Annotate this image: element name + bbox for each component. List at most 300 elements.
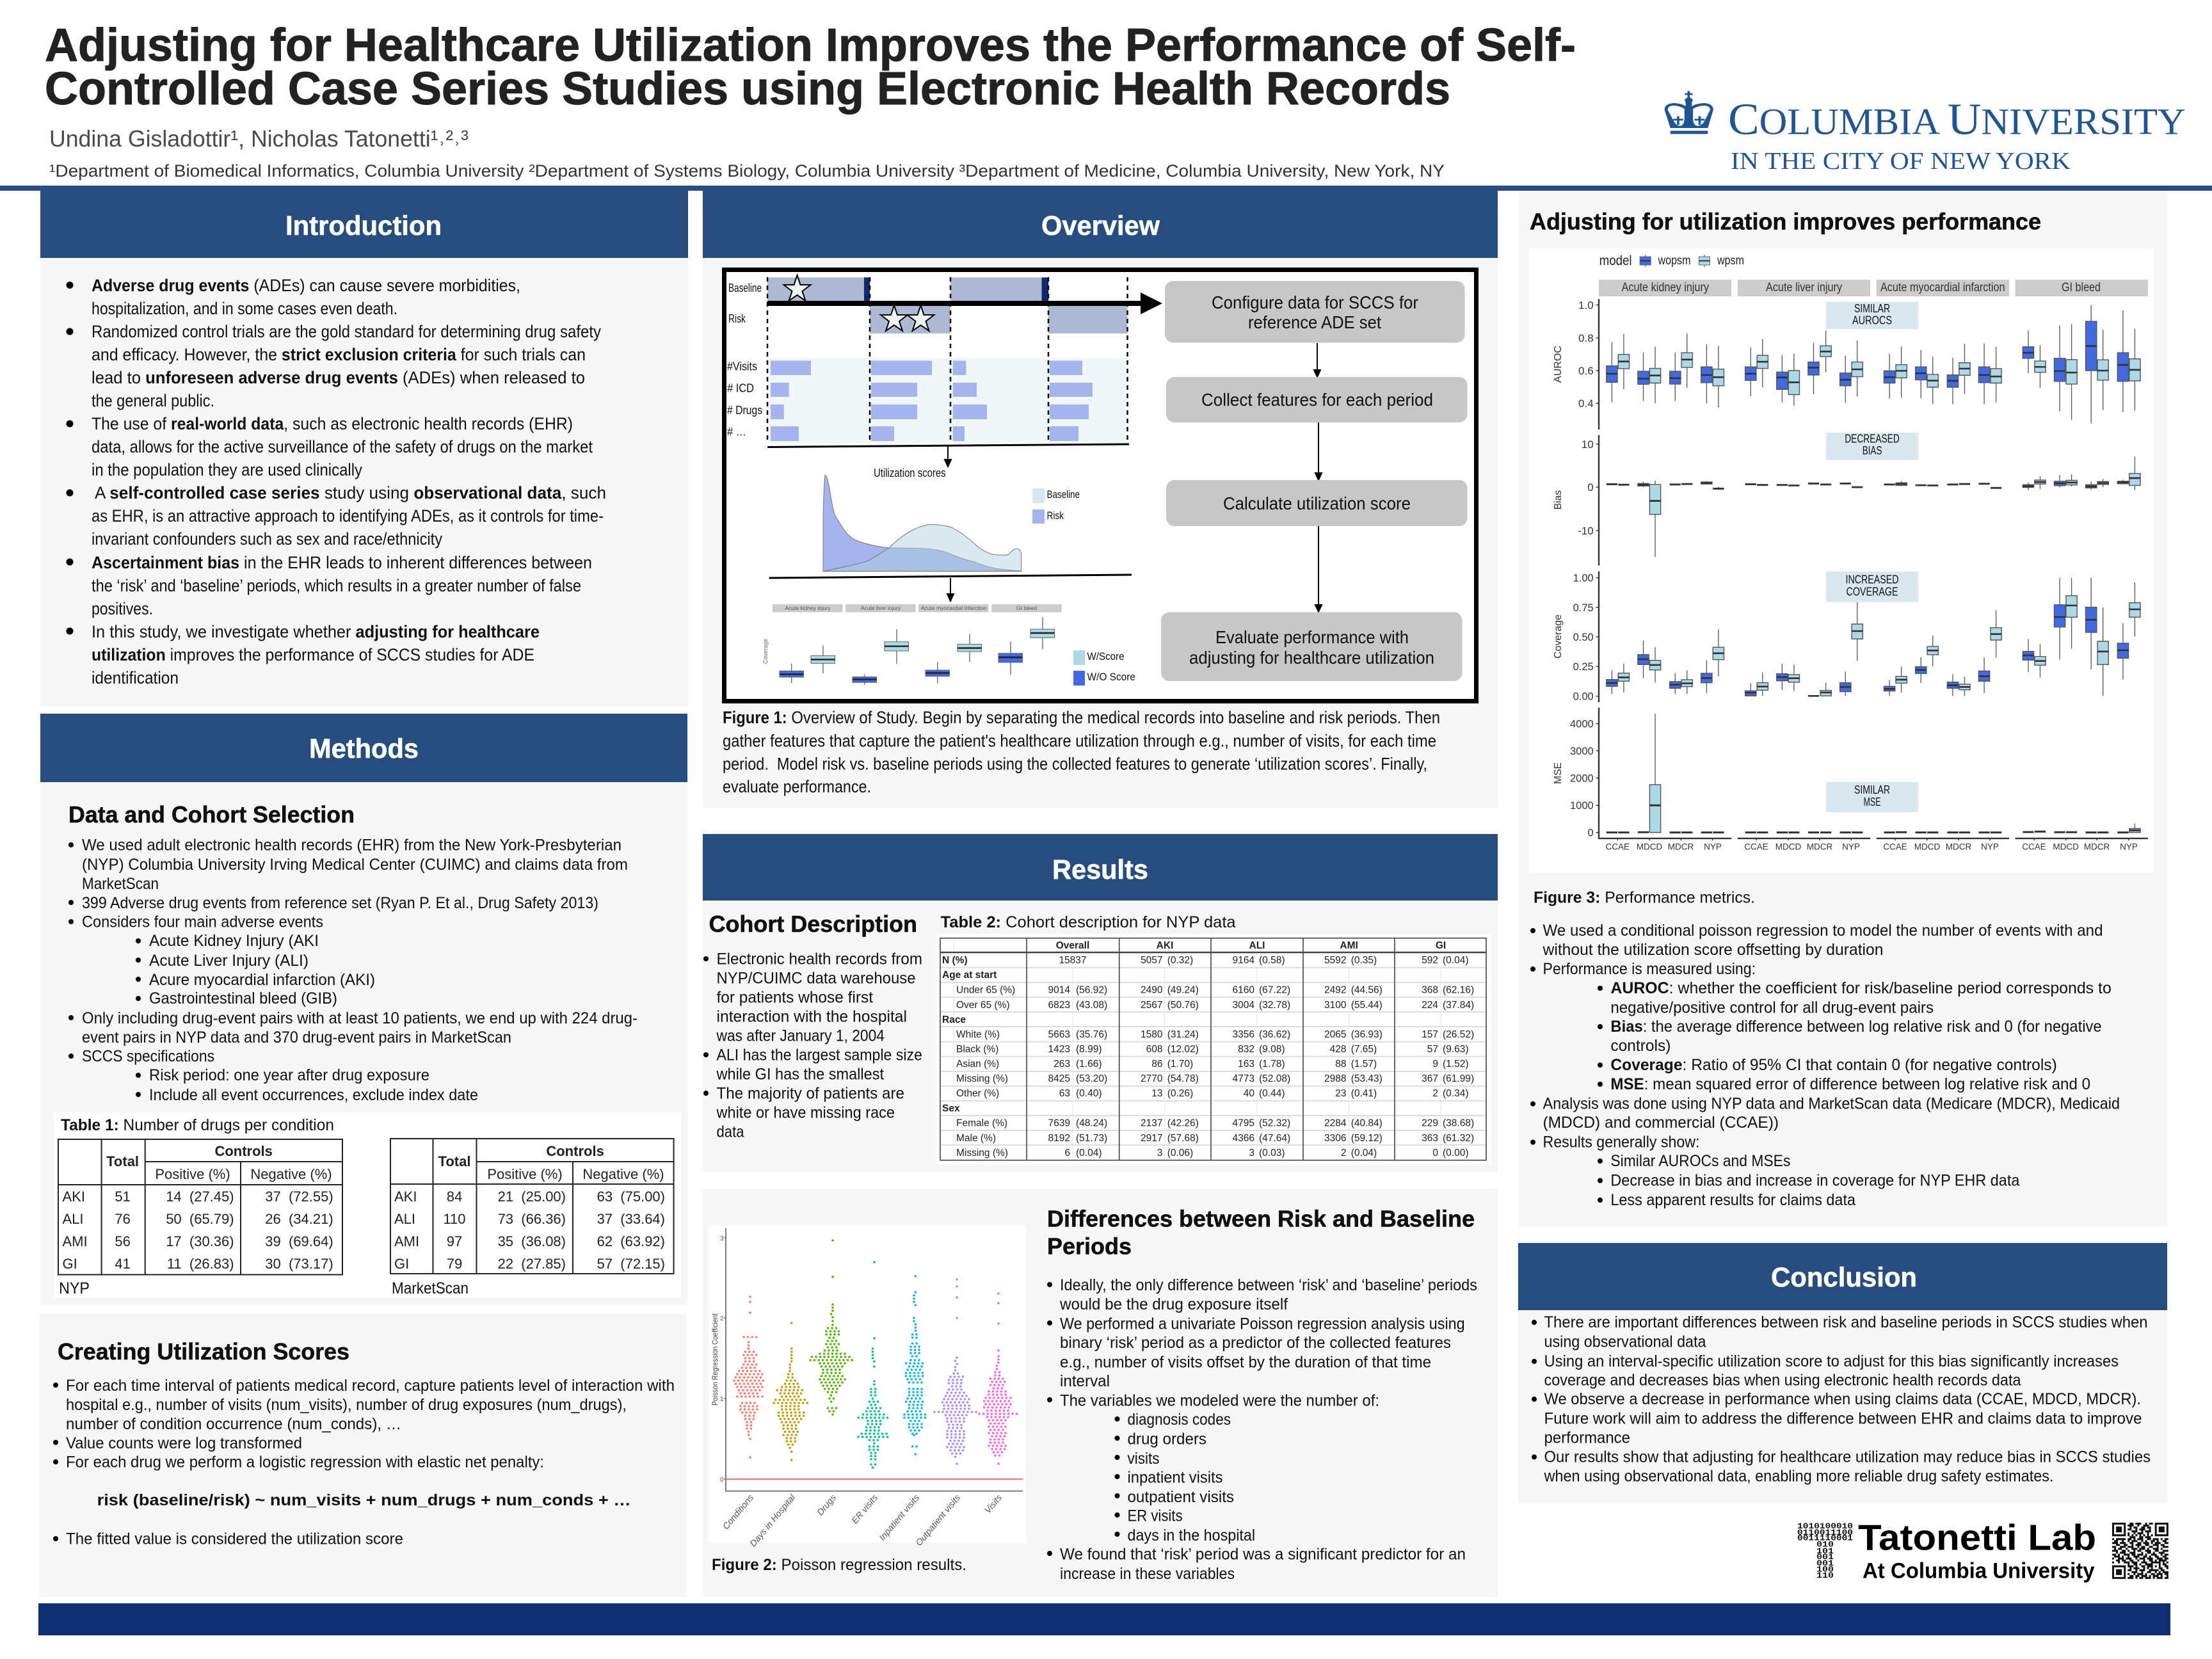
text block: introduction bullets: The use of real-world data, such as electronic health records (EHR) bbox=[92, 414, 573, 433]
table: NYP: 17 (30.36) bbox=[166, 1233, 234, 1249]
table 2: cohort description: 3356 bbox=[1233, 1029, 1254, 1040]
text block: utilization score bullets: hospital e.g., number of visits (num_visits), number of drug exposures (num_drugs), bbox=[66, 1396, 627, 1414]
step: calculate score: Calculate utilization score bbox=[1223, 493, 1411, 513]
x axis labels: Days in Hospital bbox=[748, 1492, 797, 1548]
panel: methods bbox=[40, 714, 687, 1304]
subheading: differences bbox=[1047, 1206, 1475, 1259]
chart: bias: 0 bbox=[1587, 481, 1594, 493]
text block: introduction bullets: hospitalization, and in some cases even death. bbox=[92, 299, 397, 318]
facet strips: Acute kidney injury bbox=[1622, 281, 1709, 294]
table 2: cohort description: (0.06) bbox=[1167, 1148, 1193, 1158]
x axis labels: Inpatient visits bbox=[877, 1493, 921, 1543]
icon: crown bbox=[1665, 91, 1713, 134]
table 2: cohort description: AKI bbox=[1157, 940, 1173, 951]
text block: introduction bullets: identification bbox=[92, 668, 179, 687]
panel: overview bbox=[703, 191, 1498, 808]
figure 2: poisson regression swarm plot: 0 bbox=[720, 1477, 724, 1484]
text block: cohort bullets: The majority of patients are bbox=[717, 1085, 904, 1103]
table 2: cohort description: (0.58) bbox=[1259, 955, 1285, 966]
text block: data and cohort bullets: SCCS specifications bbox=[82, 1047, 214, 1065]
chart: MSE: NYP bbox=[1842, 842, 1860, 852]
chart: mini coverage boxplot: Acute myocardial infarction bbox=[921, 605, 986, 611]
table 2: cohort description: (1.78) bbox=[1259, 1059, 1285, 1070]
table 2: cohort description: (55.44) bbox=[1351, 1000, 1382, 1011]
legend: model: wopsm bbox=[1658, 254, 1691, 268]
table 2: cohort description: (48.24) bbox=[1076, 1118, 1107, 1129]
heading: introduction: Introduction bbox=[285, 211, 442, 241]
table 2: cohort description: 2490 bbox=[1141, 985, 1163, 996]
logo: Tatonetti Lab bbox=[1797, 1517, 2096, 1583]
chart: coverage bbox=[1553, 572, 2140, 703]
table: MarketScan: 84 bbox=[447, 1189, 462, 1205]
text block: introduction bullets: lead to unforeseen adverse drug events (ADEs) when released to bbox=[92, 368, 585, 387]
chart: MSE: MDCD bbox=[1914, 842, 1940, 852]
text block: conclusion bullets: using observational data bbox=[1544, 1333, 1706, 1351]
wordmark: COLUMBIA UNIVERSITY bbox=[1728, 95, 2186, 144]
timeline: baseline and risk periods: # Drugs bbox=[727, 404, 762, 417]
affiliations: ¹Department of Biomedical Informatics, Columbia University ²Department of Systems Biology, Columbia University ³Department of Medicine, Columbia University, New York, NY bbox=[49, 161, 1445, 180]
text block: performance bullets: Similar AUROCs and MSEs bbox=[1610, 1152, 1790, 1170]
table 2: cohort description: (0.26) bbox=[1167, 1088, 1193, 1099]
icon: binary T mark: 101 bbox=[1816, 1546, 1834, 1556]
table: NYP: Controls bbox=[214, 1143, 273, 1159]
table: NYP: 30 (73.17) bbox=[265, 1256, 333, 1272]
text block: cohort bullets: interaction with the hospital bbox=[717, 1008, 907, 1026]
callout: increased coverage: INCREASED bbox=[1846, 573, 1898, 586]
text block: differences bullets: diagnosis codes bbox=[1128, 1411, 1231, 1429]
text block: differences bullets: drug orders bbox=[1128, 1430, 1206, 1448]
table 2: cohort description: 163 bbox=[1238, 1059, 1254, 1070]
table: NYP: Positive (%) bbox=[155, 1166, 230, 1182]
table 2: cohort description: 3004 bbox=[1233, 1000, 1254, 1011]
heading: introduction bbox=[40, 191, 688, 258]
chart: MSE: 2000 bbox=[1570, 773, 1594, 785]
table 2: cohort description: 8425 bbox=[1048, 1073, 1070, 1084]
icon: QR code bbox=[2112, 1524, 2168, 1578]
subheading: differences: Periods bbox=[1047, 1233, 1132, 1259]
table 2: cohort description: (36.62) bbox=[1259, 1029, 1290, 1040]
table 2: cohort description: (31.24) bbox=[1167, 1029, 1199, 1040]
table: NYP: GI bbox=[63, 1256, 77, 1272]
footer bar bbox=[38, 1603, 2170, 1635]
table: MarketScan: 35 (36.08) bbox=[498, 1233, 566, 1249]
panel: introduction bbox=[40, 191, 688, 707]
table 2: cohort description: 428 bbox=[1330, 1044, 1347, 1055]
chart: AUROC: 0.4 bbox=[1578, 397, 1594, 410]
chart: MSE: MDCR bbox=[1807, 842, 1832, 852]
step: configure data bbox=[1165, 281, 1465, 342]
chart: MSE: NYP bbox=[1704, 842, 1722, 852]
chart: coverage: 1.00 bbox=[1573, 573, 1594, 584]
table 2: cohort description: 3 bbox=[1249, 1148, 1254, 1158]
text block: performance bullets: Less apparent results for claims data bbox=[1610, 1191, 1855, 1209]
table 2: cohort description: 6160 bbox=[1233, 985, 1254, 996]
table 2: cohort description: 9014 bbox=[1048, 985, 1070, 996]
heading: methods: Methods bbox=[309, 733, 419, 764]
table 2: cohort description: 23 bbox=[1335, 1088, 1347, 1099]
chart: coverage: 0.25 bbox=[1573, 661, 1594, 673]
table 2: cohort description: 4366 bbox=[1233, 1133, 1254, 1144]
chart: MSE: CCAE bbox=[2022, 842, 2046, 852]
x axis labels: Outpatient visits bbox=[913, 1493, 962, 1548]
step: evaluate performance: Evaluate performance with bbox=[1215, 627, 1409, 647]
table: NYP: AKI bbox=[63, 1189, 85, 1205]
text block: introduction bullets: the ‘risk’ and ‘baseline’ periods, which results in a greater number of false bbox=[92, 576, 581, 595]
text block: cohort bullets: NYP/CUIMC data warehouse bbox=[717, 970, 915, 988]
table 2: cohort description: (1.70) bbox=[1167, 1059, 1193, 1070]
callout: decreased bias: BIAS bbox=[1863, 444, 1882, 457]
legend: model: wpsm bbox=[1717, 254, 1744, 268]
table 2: cohort description: 9164 bbox=[1233, 955, 1254, 966]
table 2: cohort description: 6 bbox=[1064, 1148, 1070, 1158]
figure 1 caption: Figure 1: Overview of Study. Begin by separating the medical records into baseline and risk periods. Then bbox=[723, 708, 1440, 727]
panel: results cohort description bbox=[703, 834, 1498, 1172]
table 2: cohort description: (9.63) bbox=[1443, 1044, 1468, 1055]
chart: AUROC: AUROC bbox=[1553, 346, 1564, 383]
figure 1 caption: period. Model risk vs. baseline periods using the collected features to generate ‘utilization scores’. Finally, bbox=[723, 755, 1427, 774]
chart: MSE: CCAE bbox=[1744, 842, 1768, 852]
table 2: cohort description: 368 bbox=[1422, 985, 1438, 996]
facet strips: GI bleed bbox=[2062, 281, 2101, 294]
table 2: cohort description: 2567 bbox=[1141, 1000, 1162, 1011]
icon: binary T mark: 001 bbox=[1816, 1559, 1834, 1568]
text block: data and cohort bullets: We used adult electronic health records (EHR) from the New York-Presbyterian bbox=[82, 836, 621, 854]
figure 2 caption: Figure 2: Poisson regression results. bbox=[712, 1556, 966, 1574]
chart: bias: 10 bbox=[1582, 438, 1594, 451]
text block: introduction bullets: A self-controlled case series study using observational data, such bbox=[95, 483, 606, 502]
arrow: step 1 to 2 bbox=[1314, 343, 1320, 377]
arrow: step 2 to 3 bbox=[1315, 422, 1322, 480]
table 2: cohort description: Over 65 (%) bbox=[956, 1000, 1010, 1011]
text block: introduction bullets: in the population they are used clinically bbox=[92, 460, 362, 479]
text block: conclusion bullets bbox=[1534, 1313, 2151, 1486]
table 2: cohort description: 5663 bbox=[1048, 1029, 1070, 1040]
text block: conclusion bullets: Our results show that adjusting for healthcare utilization may reduce bias in SCCS studies bbox=[1544, 1448, 2151, 1466]
text block: data and cohort bullets: Include all event occurrences, exclude index date bbox=[149, 1086, 478, 1104]
table 2: cohort description: 88 bbox=[1335, 1059, 1347, 1070]
text block: cohort bullets: while GI has the smallest bbox=[716, 1066, 884, 1084]
table 2: cohort description: (67.22) bbox=[1259, 985, 1290, 996]
text block: differences bullets: interval bbox=[1060, 1372, 1110, 1390]
swarm: drugs bbox=[810, 1240, 855, 1415]
table 2: cohort description: GI bbox=[1436, 940, 1446, 951]
text block: utilization score bullets: For each time interval of patients medical record, capture patients level of interaction with bbox=[66, 1377, 675, 1395]
table 2: cohort description: 367 bbox=[1422, 1073, 1438, 1084]
timeline: baseline and risk periods: # ICD bbox=[727, 382, 754, 395]
table 2: cohort description: 608 bbox=[1146, 1044, 1162, 1055]
callout: decreased bias bbox=[1826, 433, 1918, 460]
chart: utilization score densities bbox=[769, 467, 1132, 578]
text block: conclusion bullets: performance bbox=[1544, 1429, 1630, 1447]
table 2: cohort description: (57.68) bbox=[1167, 1133, 1199, 1144]
table 2: cohort description: 2137 bbox=[1141, 1118, 1162, 1129]
text block: performance bullets: AUROC: whether the coefficient for risk/baseline period corresponds to bbox=[1610, 979, 2112, 997]
text block: differences bullets bbox=[1050, 1276, 1477, 1583]
table 2: cohort description: Missing (%) bbox=[956, 1148, 1008, 1158]
icon: binary T mark: 0110011100 bbox=[1797, 1528, 1853, 1537]
table 2: cohort description: (26.52) bbox=[1443, 1029, 1474, 1040]
table 2: cohort description: (9.08) bbox=[1259, 1044, 1285, 1055]
chart: MSE: MDCR bbox=[1946, 842, 1971, 852]
arrow: step 3 to 4 bbox=[1315, 526, 1322, 612]
table: MarketScan: 63 (75.00) bbox=[597, 1189, 665, 1205]
text block: differences bullets: days in the hospital bbox=[1128, 1527, 1255, 1544]
text block: utilization score bullets: number of condition occurrence (num_conds), … bbox=[66, 1415, 401, 1433]
callout: similar AUROCs: AUROCS bbox=[1852, 314, 1892, 327]
x axis labels: Visits bbox=[982, 1493, 1004, 1515]
table: MarketScan: Positive (%) bbox=[487, 1166, 563, 1182]
table 2: cohort description: 6823 bbox=[1048, 1000, 1070, 1011]
chart: utilization score densities: Utilization scores bbox=[874, 467, 946, 479]
table: NYP: 37 (72.55) bbox=[265, 1189, 333, 1205]
text block: data and cohort bullets: Gastrointestinal bleed (GIB) bbox=[149, 990, 337, 1007]
icon: binary T mark bbox=[1797, 1521, 1853, 1580]
table: NYP: 41 bbox=[115, 1256, 131, 1272]
table 2: cohort description: Black (%) bbox=[956, 1044, 998, 1055]
text block: introduction bullets: Randomized control trials are the gold standard for determining drug safety bbox=[92, 322, 601, 341]
table 2: cohort description: (52.32) bbox=[1259, 1118, 1290, 1129]
text block: performance bullets: Analysis was done using NYP data and MarketScan data (Medicare (MDCR), Medicaid bbox=[1543, 1095, 2120, 1113]
subheading: adjusting for utilization: Adjusting for utilization improves performance bbox=[1530, 209, 2041, 234]
table 2: cohort description: (1.57) bbox=[1351, 1059, 1377, 1070]
table 2: cohort description: (50.76) bbox=[1167, 1000, 1199, 1011]
text block: performance bullets: We used a conditional poisson regression to model the number of events with and bbox=[1543, 922, 2103, 940]
table 2: cohort description: 592 bbox=[1422, 955, 1438, 966]
table: MarketScan: Negative (%) bbox=[582, 1166, 664, 1182]
heading: conclusion: Conclusion bbox=[1771, 1262, 1917, 1293]
table 2: cohort description bbox=[936, 934, 1491, 1164]
chart: AUROC bbox=[1553, 299, 2140, 429]
table 2: cohort description: (61.32) bbox=[1443, 1133, 1474, 1144]
step: configure data: reference ADE set bbox=[1248, 312, 1381, 332]
callout: increased coverage bbox=[1826, 572, 1918, 602]
text block: performance bullets: (MDCD) and commercial (CCAE)) bbox=[1543, 1114, 1779, 1132]
table 2: cohort description: 1580 bbox=[1141, 1029, 1163, 1040]
table 2: cohort description: 0 bbox=[1432, 1148, 1438, 1158]
table 2: cohort description: (62.16) bbox=[1443, 985, 1474, 996]
table 2: cohort description: 363 bbox=[1422, 1133, 1438, 1144]
table 2: cohort description: (0.41) bbox=[1351, 1088, 1377, 1099]
table: NYP: 51 bbox=[115, 1189, 131, 1205]
text block: performance bullets bbox=[1533, 922, 2120, 1209]
text block: differences bullets: would be the drug exposure itself bbox=[1059, 1295, 1288, 1313]
text block: cohort bullets: ALI has the largest sample size bbox=[717, 1046, 922, 1064]
table 2: cohort description: Overall bbox=[1056, 940, 1089, 951]
figure 2: poisson regression swarm plot: 3 bbox=[720, 1235, 724, 1242]
icon: binary T mark: 0011110001 bbox=[1797, 1534, 1853, 1543]
chart: coverage: 0.00 bbox=[1573, 691, 1594, 703]
table 2: cohort description: (35.76) bbox=[1076, 1029, 1107, 1040]
logo: Columbia University bbox=[1665, 91, 2186, 175]
table 2: cohort description: 3306 bbox=[1324, 1133, 1347, 1144]
table 2 caption: Table 2: Cohort description for NYP data bbox=[941, 913, 1236, 931]
table: NYP: 39 (69.64) bbox=[265, 1233, 333, 1249]
panel: creating utilization scores bbox=[39, 1314, 687, 1597]
panel: conclusion bbox=[1518, 1243, 2167, 1503]
table: NYP bbox=[58, 1139, 342, 1275]
text block: introduction bullets: data, allows for the active surveillance of the safety of drugs on the market bbox=[92, 437, 593, 456]
chart: MSE: MDCD bbox=[1775, 842, 1801, 852]
icon: binary T mark: 110 bbox=[1816, 1571, 1834, 1580]
table 2: cohort description: 40 bbox=[1244, 1088, 1254, 1099]
table 2: cohort description: (38.68) bbox=[1443, 1118, 1474, 1129]
arrow: to utilization scores bbox=[945, 445, 951, 467]
chart: MSE: 1000 bbox=[1570, 800, 1594, 812]
table: MarketScan: AKI bbox=[394, 1189, 417, 1205]
text block: utilization score bullets: The fitted value is considered the utilization score bbox=[66, 1530, 403, 1548]
table: MarketScan: GI bbox=[394, 1256, 409, 1272]
authors: Undina Gisladottir¹, Nicholas Tatonetti¹˒²˒³ bbox=[49, 125, 469, 152]
chart: MSE bbox=[1553, 708, 2148, 852]
chart: MSE: 4000 bbox=[1570, 719, 1594, 730]
chart: MSE: CCAE bbox=[1606, 842, 1630, 852]
table 1 caption: Table 1: Number of drugs per condition bbox=[61, 1116, 334, 1134]
facet strips: Acute liver injury bbox=[1766, 281, 1842, 294]
table 2: cohort description: 2492 bbox=[1324, 985, 1347, 996]
x axis labels: Conditions bbox=[721, 1493, 755, 1532]
table 2: cohort description: (0.32) bbox=[1167, 955, 1193, 966]
facet strips bbox=[1599, 280, 2148, 296]
text block: performance bullets: negative/positive control for all drug-event pairs bbox=[1610, 998, 1934, 1016]
text block: data and cohort bullets: Only including drug-event pairs with at least 10 patients, we end up with 224 drug- bbox=[82, 1009, 637, 1027]
table 2: cohort description: (1.52) bbox=[1443, 1059, 1468, 1070]
callout: similar MSE: SIMILAR bbox=[1854, 783, 1890, 796]
text block: performance bullets: without the utilization score offsetting by duration bbox=[1543, 941, 1883, 959]
lab name: Tatonetti Lab bbox=[1858, 1517, 2096, 1558]
table: MarketScan: 21 (25.00) bbox=[498, 1189, 566, 1205]
table 2: cohort description: 229 bbox=[1422, 1118, 1438, 1129]
table: MarketScan: 97 bbox=[447, 1233, 462, 1249]
chart: coverage: 0.75 bbox=[1573, 602, 1594, 614]
icon: binary T mark: 001 bbox=[1816, 1552, 1834, 1562]
table 2: cohort description: 13 bbox=[1151, 1088, 1162, 1099]
table 2: cohort description: (1.66) bbox=[1076, 1059, 1102, 1070]
table: NYP: ALI bbox=[63, 1211, 84, 1227]
table: NYP: 26 (34.21) bbox=[265, 1211, 333, 1227]
timeline: baseline and risk periods: #Visits bbox=[727, 360, 757, 373]
chart: AUROC: 0.6 bbox=[1578, 365, 1594, 377]
chart: bias bbox=[1553, 435, 2140, 566]
table 2: cohort description: (0.00) bbox=[1443, 1148, 1468, 1158]
x axis labels: ER visits bbox=[849, 1493, 879, 1526]
tagline: IN THE CITY OF NEW YORK bbox=[1731, 148, 2071, 175]
table 2: cohort description: 3100 bbox=[1324, 1000, 1347, 1011]
table 2: cohort description: (0.04) bbox=[1076, 1148, 1102, 1158]
text block: introduction bullets: positives. bbox=[92, 599, 153, 618]
text block: performance bullets: MSE: mean squared error of difference between log relative risk and 0 bbox=[1610, 1075, 2090, 1093]
figure 1 caption: evaluate performance. bbox=[723, 777, 871, 796]
chart: MSE: 3000 bbox=[1570, 746, 1594, 757]
chart: MSE: NYP bbox=[2120, 842, 2138, 852]
table: MarketScan: Total bbox=[438, 1153, 470, 1169]
table: MarketScan: 62 (63.92) bbox=[597, 1233, 665, 1249]
table 2: cohort description: (42.26) bbox=[1167, 1118, 1199, 1129]
table 2: cohort description: (53.20) bbox=[1076, 1073, 1107, 1084]
chart: coverage: 0.50 bbox=[1573, 632, 1594, 643]
text block: performance bullets: Coverage: Ratio of 95% CI that contain 0 (for negative controls) bbox=[1610, 1056, 2057, 1074]
table 2: cohort description: (44.56) bbox=[1351, 985, 1382, 996]
table 2: cohort description: 3 bbox=[1157, 1148, 1162, 1158]
text block: conclusion bullets: We observe a decrease in performance when using claims data (CCAE, MDCD, MDCR). bbox=[1544, 1390, 2141, 1408]
table 2: cohort description: (12.02) bbox=[1167, 1044, 1199, 1055]
text block: data and cohort bullets: MarketScan bbox=[82, 875, 159, 893]
text block: data and cohort bullets: Acute Liver Injury (ALI) bbox=[149, 952, 309, 970]
table 2: cohort description: 5592 bbox=[1324, 955, 1347, 966]
text block: conclusion bullets: There are important differences between risk and baseline periods in SCCS studies when bbox=[1544, 1313, 2148, 1331]
text block: differences bullets: inpatient visits bbox=[1128, 1468, 1222, 1486]
label: NYP: NYP bbox=[59, 1279, 90, 1297]
table 2: cohort description: (43.08) bbox=[1076, 1000, 1107, 1011]
step: calculate score bbox=[1166, 480, 1468, 526]
text block: introduction bullets: In this study, we investigate whether adjusting for healthcare bbox=[92, 622, 540, 641]
table 2: cohort description: 2065 bbox=[1324, 1029, 1347, 1040]
title bbox=[45, 20, 1576, 115]
chart: bias: Bias bbox=[1553, 490, 1564, 509]
table 2: cohort description: AMI bbox=[1340, 940, 1358, 951]
table 2: cohort description: (32.78) bbox=[1259, 1000, 1290, 1011]
callout: decreased bias: DECREASED bbox=[1845, 433, 1900, 445]
text block: conclusion bullets: Using an interval-specific utilization score to adjust for this bias significantly increases bbox=[1544, 1352, 2119, 1370]
text block: introduction bullets: as EHR, is an attractive approach to identifying ADEs, as it controls for time- bbox=[92, 506, 604, 525]
legend: model bbox=[1599, 253, 1744, 268]
table 2: cohort description: (61.99) bbox=[1443, 1073, 1474, 1084]
table 2: cohort description: 2 bbox=[1432, 1088, 1438, 1099]
table 2: cohort description: 86 bbox=[1151, 1059, 1162, 1070]
table: MarketScan: AMI bbox=[394, 1233, 419, 1249]
chart: AUROC: 0.8 bbox=[1578, 332, 1594, 344]
table: NYP: 76 bbox=[115, 1211, 131, 1227]
figure 2: poisson regression swarm plot: Poisson Regression Coefficient bbox=[710, 1313, 719, 1406]
text block: data and cohort bullets: 399 Adverse drug events from reference set (Ryan P. Et al., Drug Safety 2013) bbox=[82, 894, 598, 912]
heading: overview bbox=[703, 191, 1498, 258]
table: MarketScan: 37 (33.64) bbox=[597, 1211, 665, 1227]
text block: data and cohort bullets: Risk period: one year after drug exposure bbox=[149, 1066, 429, 1084]
table 2: cohort description: White (%) bbox=[956, 1029, 1000, 1040]
swarm: days in hospital bbox=[774, 1323, 809, 1460]
swarm: conditions bbox=[734, 1297, 766, 1457]
table: MarketScan bbox=[390, 1139, 674, 1274]
timeline: baseline and risk periods: Baseline bbox=[728, 282, 762, 294]
title: Controlled Case Series Studies using Electronic Health Records bbox=[45, 63, 1450, 115]
table 2: cohort description: (0.34) bbox=[1443, 1088, 1468, 1099]
text block: performance bullets: Performance is measured using: bbox=[1543, 960, 1756, 978]
figure 2: poisson regression swarm plot: 2 bbox=[720, 1315, 724, 1322]
table 2: cohort description: (0.04) bbox=[1351, 1148, 1377, 1158]
swarm: inpatient visits bbox=[904, 1276, 927, 1454]
panel: adjusting for utilization improves performance bbox=[1519, 191, 2167, 1227]
text block: introduction bullets: and efficacy. However, the strict exclusion criteria for such trials can bbox=[92, 345, 586, 364]
table 2: cohort description: (54.78) bbox=[1167, 1073, 1199, 1084]
text block: utilization score bullets: risk (baseline/risk) ~ num_visits + num_drugs + num_conds + … bbox=[97, 1491, 631, 1509]
table 2: cohort description: 4773 bbox=[1233, 1073, 1254, 1084]
figure 1 caption bbox=[723, 708, 1440, 796]
figure 3: performance boxplots bbox=[1529, 248, 2154, 873]
chart: MSE: MSE bbox=[1553, 762, 1564, 784]
text block: cohort bullets bbox=[706, 950, 922, 1141]
icon: binary T mark: 1010100010 bbox=[1797, 1521, 1853, 1531]
table 2: cohort description: (7.65) bbox=[1351, 1044, 1377, 1055]
chart: utilization score densities: Baseline bbox=[1047, 488, 1080, 501]
table: MarketScan: 79 bbox=[447, 1256, 462, 1272]
table: MarketScan: 110 bbox=[443, 1211, 466, 1227]
table: NYP: 14 (27.45) bbox=[166, 1189, 234, 1205]
table 2: cohort description: 57 bbox=[1427, 1044, 1438, 1055]
text block: data and cohort bullets: (NYP) Columbia University Irving Medical Center (CUIMC) and claims data from bbox=[82, 856, 628, 874]
callout: similar AUROCs: SIMILAR bbox=[1854, 302, 1890, 315]
table 2: cohort description: 9 bbox=[1432, 1059, 1438, 1070]
table: NYP: AMI bbox=[63, 1233, 88, 1249]
text block: utilization score bullets bbox=[56, 1377, 675, 1548]
